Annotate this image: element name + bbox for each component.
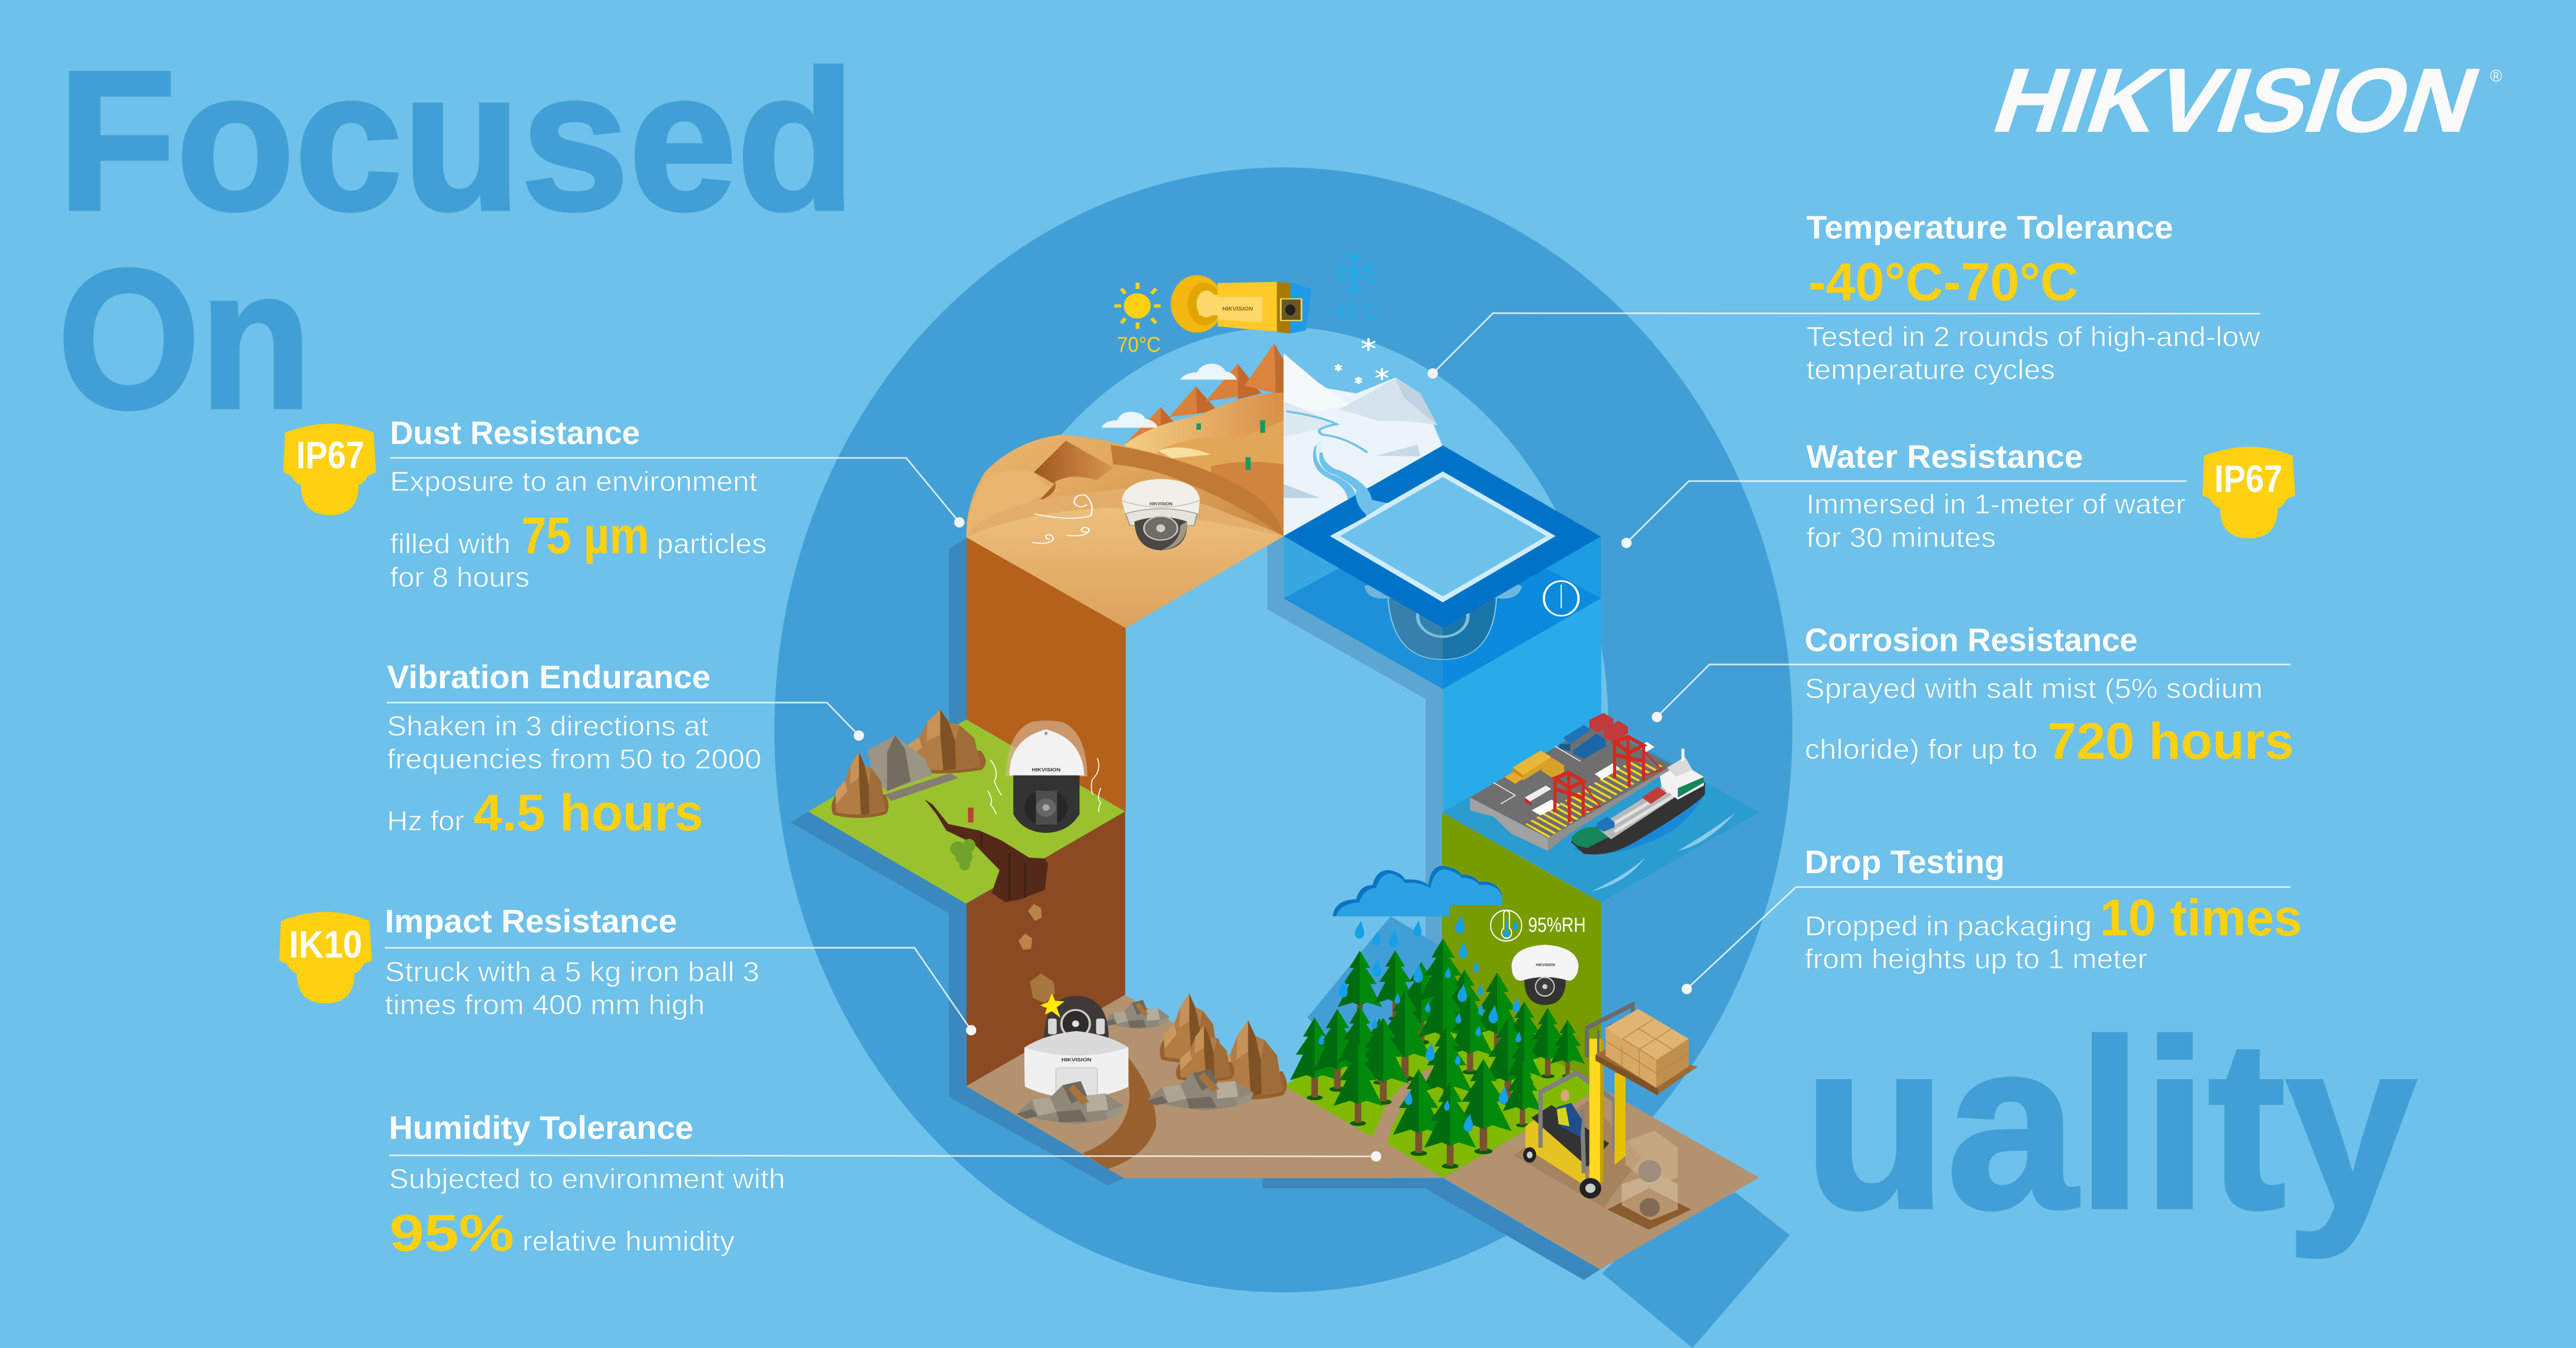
body text (1806, 321, 2261, 385)
stacked cartons (1605, 1009, 1689, 1088)
body text: for 8 hours (390, 562, 530, 593)
shrub (950, 839, 975, 871)
callout: humidity tolerance (389, 1110, 1381, 1262)
body text (1805, 673, 2294, 770)
body text: relative humidity (522, 1226, 735, 1257)
heading: Corrosion Resistance (1805, 622, 2138, 658)
body text: 95% (389, 1204, 514, 1262)
body text: temperature cycles (1806, 354, 2055, 385)
left dune lobe (967, 470, 1060, 537)
badge: IK10 (279, 912, 372, 1003)
logo: Hikvision: HIKVISION (1982, 50, 2492, 151)
front rubble (1016, 1081, 1124, 1124)
submerged dome camera (1365, 578, 1522, 659)
body text (389, 1164, 785, 1262)
icon: thermometer humidity (1490, 910, 1522, 941)
body text: Hz for (387, 806, 464, 837)
impact dome camera (1024, 993, 1128, 1099)
bullet camera: HIKVISION (1222, 305, 1253, 312)
heading: Humidity Tolerance (389, 1110, 693, 1146)
impact dome camera: HIKVISION (1061, 1057, 1091, 1063)
background rubble and rocks (1104, 994, 1287, 1111)
heading: Dust Resistance (390, 415, 640, 451)
icon: sand cacti (1196, 420, 1265, 470)
dune crest (1034, 441, 1113, 502)
icon: big snowflake (1336, 252, 1374, 294)
logo: Hikvision: ® (2490, 66, 2502, 85)
heading: Impact Resistance (385, 903, 677, 940)
body text: from heights up to 1 meter (1805, 944, 2147, 975)
body text: for 30 minutes (1806, 522, 1996, 553)
body text: Exposure to an environment (390, 466, 757, 497)
body text (1806, 489, 2185, 553)
body text: 75 µm (521, 507, 649, 565)
column wall: brown lower (967, 811, 1125, 1086)
main dune (967, 435, 1283, 628)
containers: red (1589, 713, 1628, 742)
body text: Immersed in 1-meter of water (1806, 489, 2185, 520)
title: Focused On: Focused (58, 29, 855, 251)
callout: temperature tolerance (1428, 210, 2261, 385)
body text: Subjected to environment with (389, 1164, 785, 1195)
body text: 720 hours (2047, 712, 2294, 770)
column wall: brown upper (967, 537, 1126, 812)
column wall: green (1442, 812, 1601, 1087)
cranes (1555, 737, 1662, 822)
forklift shadow (1514, 1101, 1642, 1207)
body text (1805, 889, 2302, 975)
label: 95%RH: 95%RH (1528, 914, 1586, 936)
rain shadow (1308, 916, 1442, 1088)
title: Focused On (58, 29, 855, 450)
rain drops (1318, 915, 1521, 1132)
panel: humidity forest (1290, 866, 1698, 1230)
panel: vibration ground (808, 709, 1287, 1124)
body text: frequencies from 50 to 2000 (387, 744, 761, 775)
body text: Sprayed with salt mist (5% sodium (1805, 673, 2263, 704)
badge: IK10: IK10 (289, 923, 362, 966)
impact pad (1607, 1188, 1691, 1230)
body text: Struck with a 5 kg iron ball 3 (385, 957, 759, 987)
label: minus 40 degrees: -40°C (1329, 298, 1379, 322)
icon: stopwatch (1544, 581, 1579, 616)
clouds (1101, 364, 1236, 428)
label: 70 degrees: 70°C (1117, 332, 1161, 356)
shaking speed dome camera (1006, 721, 1088, 833)
shaking speed dome camera: HIKVISION (1032, 767, 1061, 773)
body text: 4.5 hours (473, 784, 703, 842)
badge: IP67 dust: IP67 (296, 434, 364, 476)
callout: vibration endurance (387, 659, 864, 842)
body text: Shaken in 3 directions at (387, 711, 708, 742)
badge: IP67 dust (283, 423, 376, 515)
callout: water resistance (1621, 439, 2295, 553)
callout: dust resistance (283, 415, 964, 593)
cargo ship (1571, 749, 1705, 855)
ground: forest floor (1262, 996, 1759, 1280)
column wall: blue (1443, 598, 1601, 902)
body text: particles (657, 528, 767, 559)
containers: yellow (1504, 750, 1564, 784)
column shadows (790, 536, 1443, 1185)
panel: water pool (1283, 441, 1601, 689)
truck (1524, 786, 1551, 806)
title: Focused On: On (58, 228, 312, 450)
road markings (1532, 742, 1654, 815)
badge: IP67 water: IP67 (2214, 457, 2282, 500)
heading: Temperature Tolerance (1806, 210, 2173, 246)
dropped packages (1622, 1131, 1678, 1220)
callout: impact resistance (279, 903, 976, 1035)
panel: temperature scene, desert half (967, 252, 1443, 628)
ground: forklift pad (1443, 1088, 1759, 1269)
panel: corrosion port scene (1442, 713, 1759, 902)
body text: times from 400 mm high (385, 989, 705, 1020)
dust dome camera (1122, 479, 1200, 550)
body text: chloride) for up to (1805, 734, 2038, 765)
wind swirls (1032, 495, 1092, 543)
quay slab (1470, 797, 1548, 851)
trees (1290, 939, 1585, 1169)
callout: drop testing (1682, 844, 2302, 994)
icon: snowflakes (1335, 338, 1388, 384)
badge: IP67 water (2202, 447, 2295, 538)
body text: Dropped in packaging (1805, 911, 2092, 942)
snow half (1283, 353, 1443, 536)
river inflow (1316, 441, 1393, 516)
body text: 10 times (2100, 889, 2302, 947)
icon: sun (1114, 283, 1161, 329)
body text: Tested in 2 rounds of high-and-low (1806, 321, 2261, 352)
cloud (1333, 866, 1502, 916)
bullet camera (1171, 275, 1312, 333)
containers: blue (1560, 725, 1605, 759)
heading: Drop Testing (1805, 844, 2005, 880)
humidity dome camera: HIKVISION (1536, 963, 1555, 967)
pool rim (1283, 446, 1601, 628)
body text (385, 957, 759, 1020)
body text: filled with (390, 528, 511, 559)
dust dome camera: HIKVISION (1149, 502, 1173, 507)
big letter Q ring (774, 167, 1792, 1348)
heading: Vibration Endurance (387, 659, 710, 695)
callout: corrosion resistance (1652, 622, 2294, 770)
sea plane (1442, 723, 1759, 902)
vibration lines (988, 758, 1101, 814)
ground crack (925, 799, 1048, 902)
back dunes (1124, 393, 1283, 536)
falling rocks (1019, 904, 1055, 1003)
body text (387, 711, 761, 842)
body text (390, 466, 767, 593)
rock formations (832, 709, 986, 818)
humidity dome camera (1512, 945, 1579, 1005)
heading: Water Resistance (1806, 439, 2083, 475)
ground: tan (966, 995, 1391, 1178)
temperature range: -40°C-70°C (1808, 252, 2078, 312)
dune right shadow (1110, 445, 1283, 536)
forklift (1523, 1004, 1698, 1199)
word: uality: uality (1803, 991, 2418, 1260)
distant sand mountains (1124, 344, 1283, 445)
